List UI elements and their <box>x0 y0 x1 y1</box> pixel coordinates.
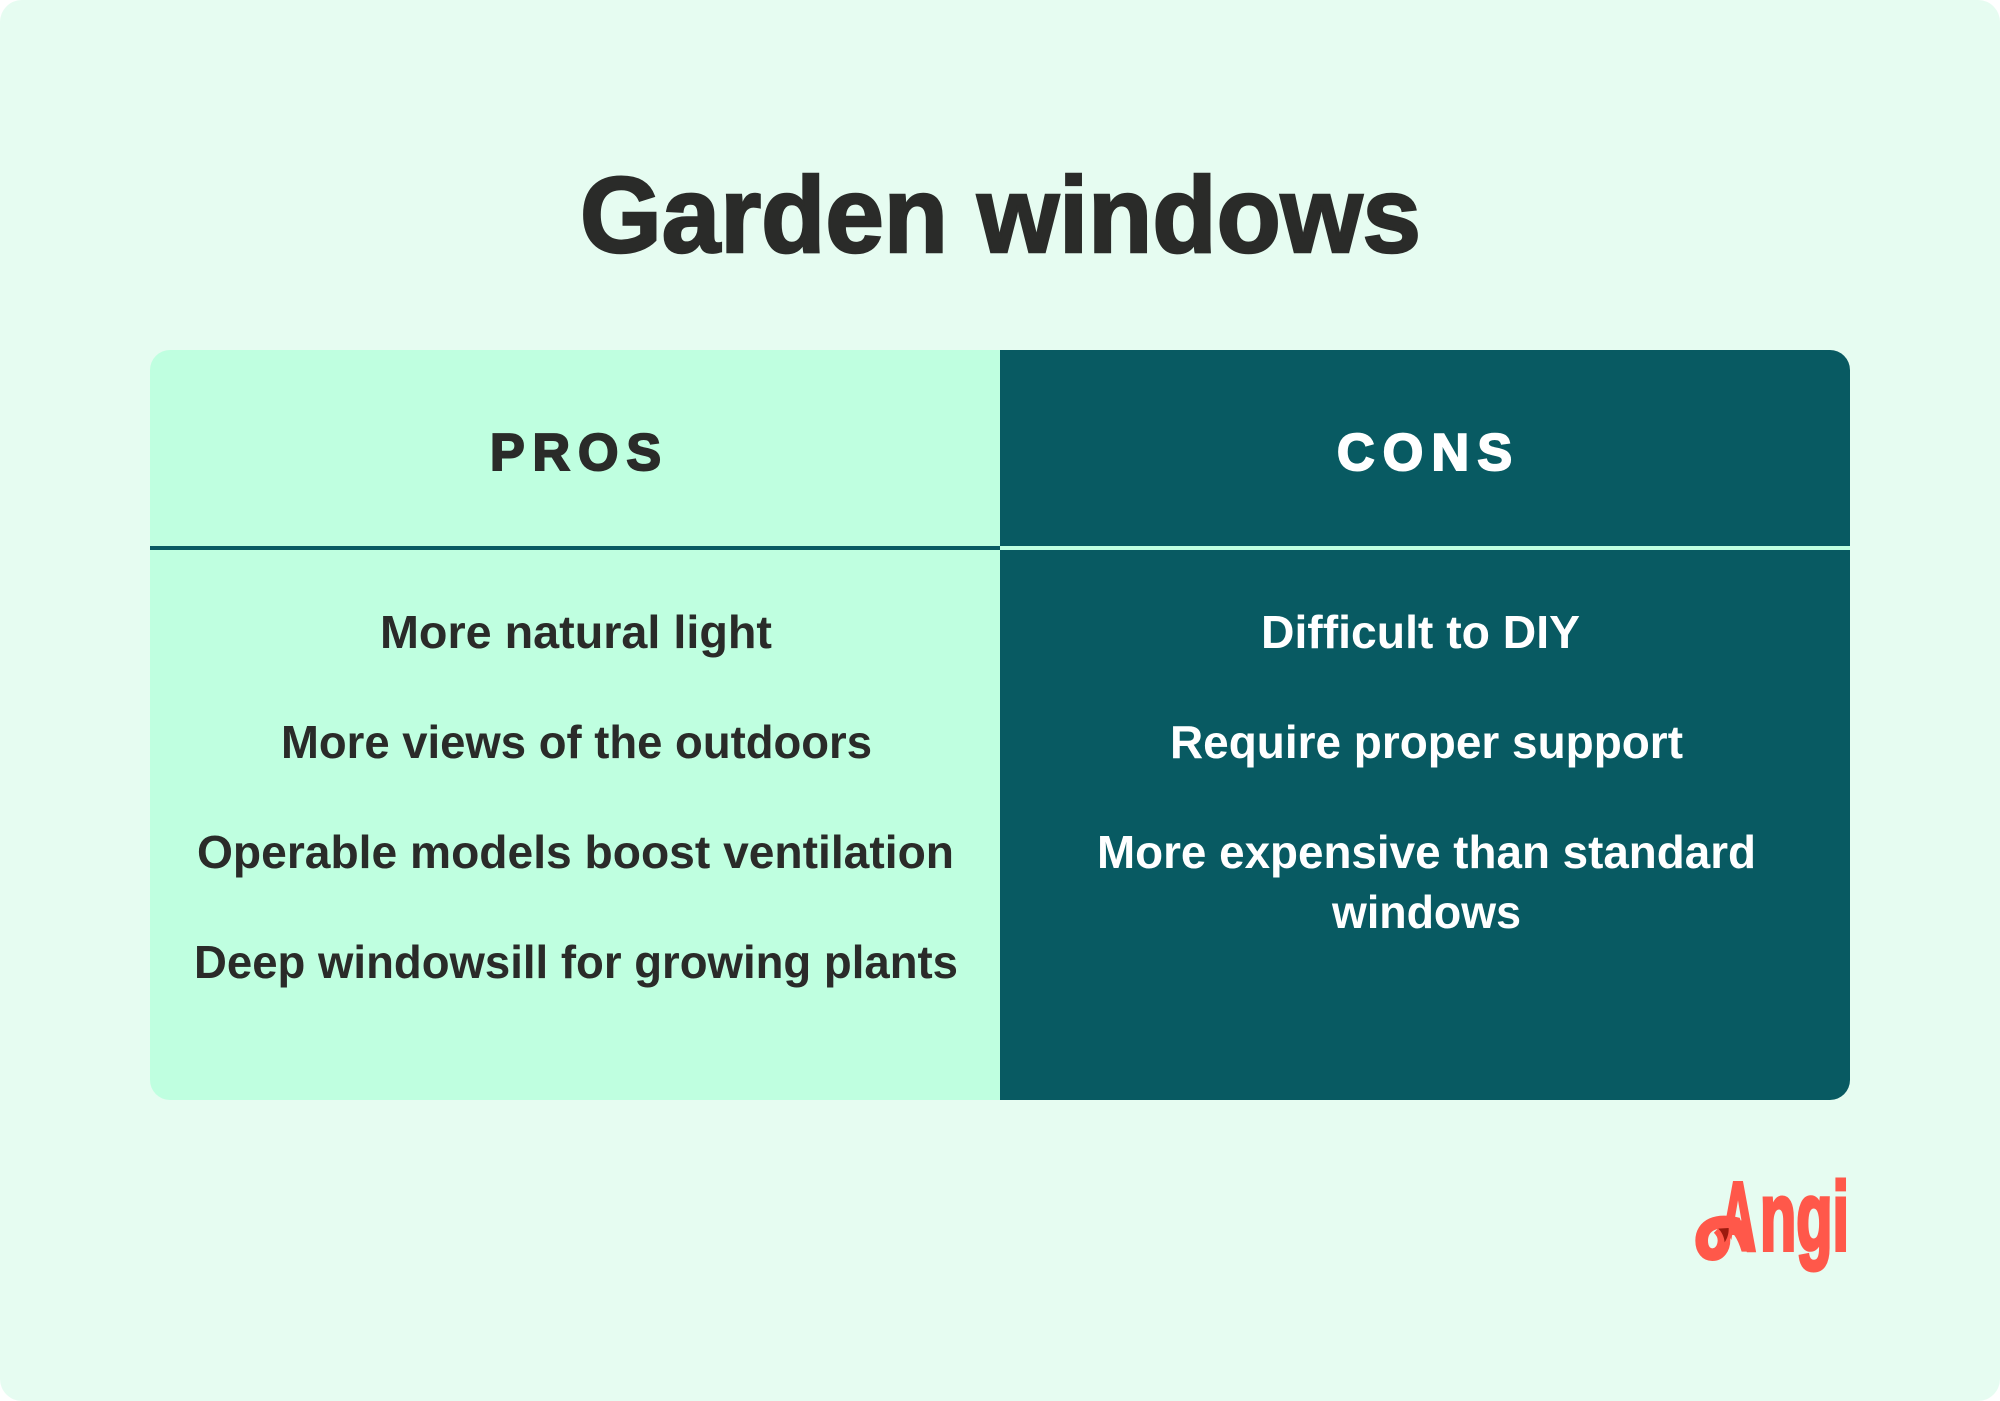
pros list: Deep windowsill for growing plants <box>194 936 958 988</box>
pros heading: PROS <box>490 424 661 482</box>
title: Garden windows <box>580 154 1421 275</box>
pros list: Operable models boost ventilation <box>197 826 954 878</box>
pros list <box>194 606 958 988</box>
logo: Angi: A <box>1720 1162 1756 1271</box>
cons heading: CONS <box>1337 424 1512 482</box>
panel: pros <box>150 350 1000 1100</box>
pros list: More natural light <box>380 606 772 658</box>
panel: cons <box>1000 350 1850 1100</box>
cons list: windows <box>1331 886 1521 938</box>
cons list <box>1097 606 1756 938</box>
cons list: More expensive than standard <box>1097 826 1756 878</box>
cons list: Difficult to DIY <box>1261 606 1580 658</box>
pros list: More views of the outdoors <box>281 716 872 768</box>
logo: Angi <box>1695 1178 1846 1272</box>
logo: Angi: ngi <box>1760 1162 1849 1271</box>
cons list: Require proper support <box>1170 716 1683 768</box>
